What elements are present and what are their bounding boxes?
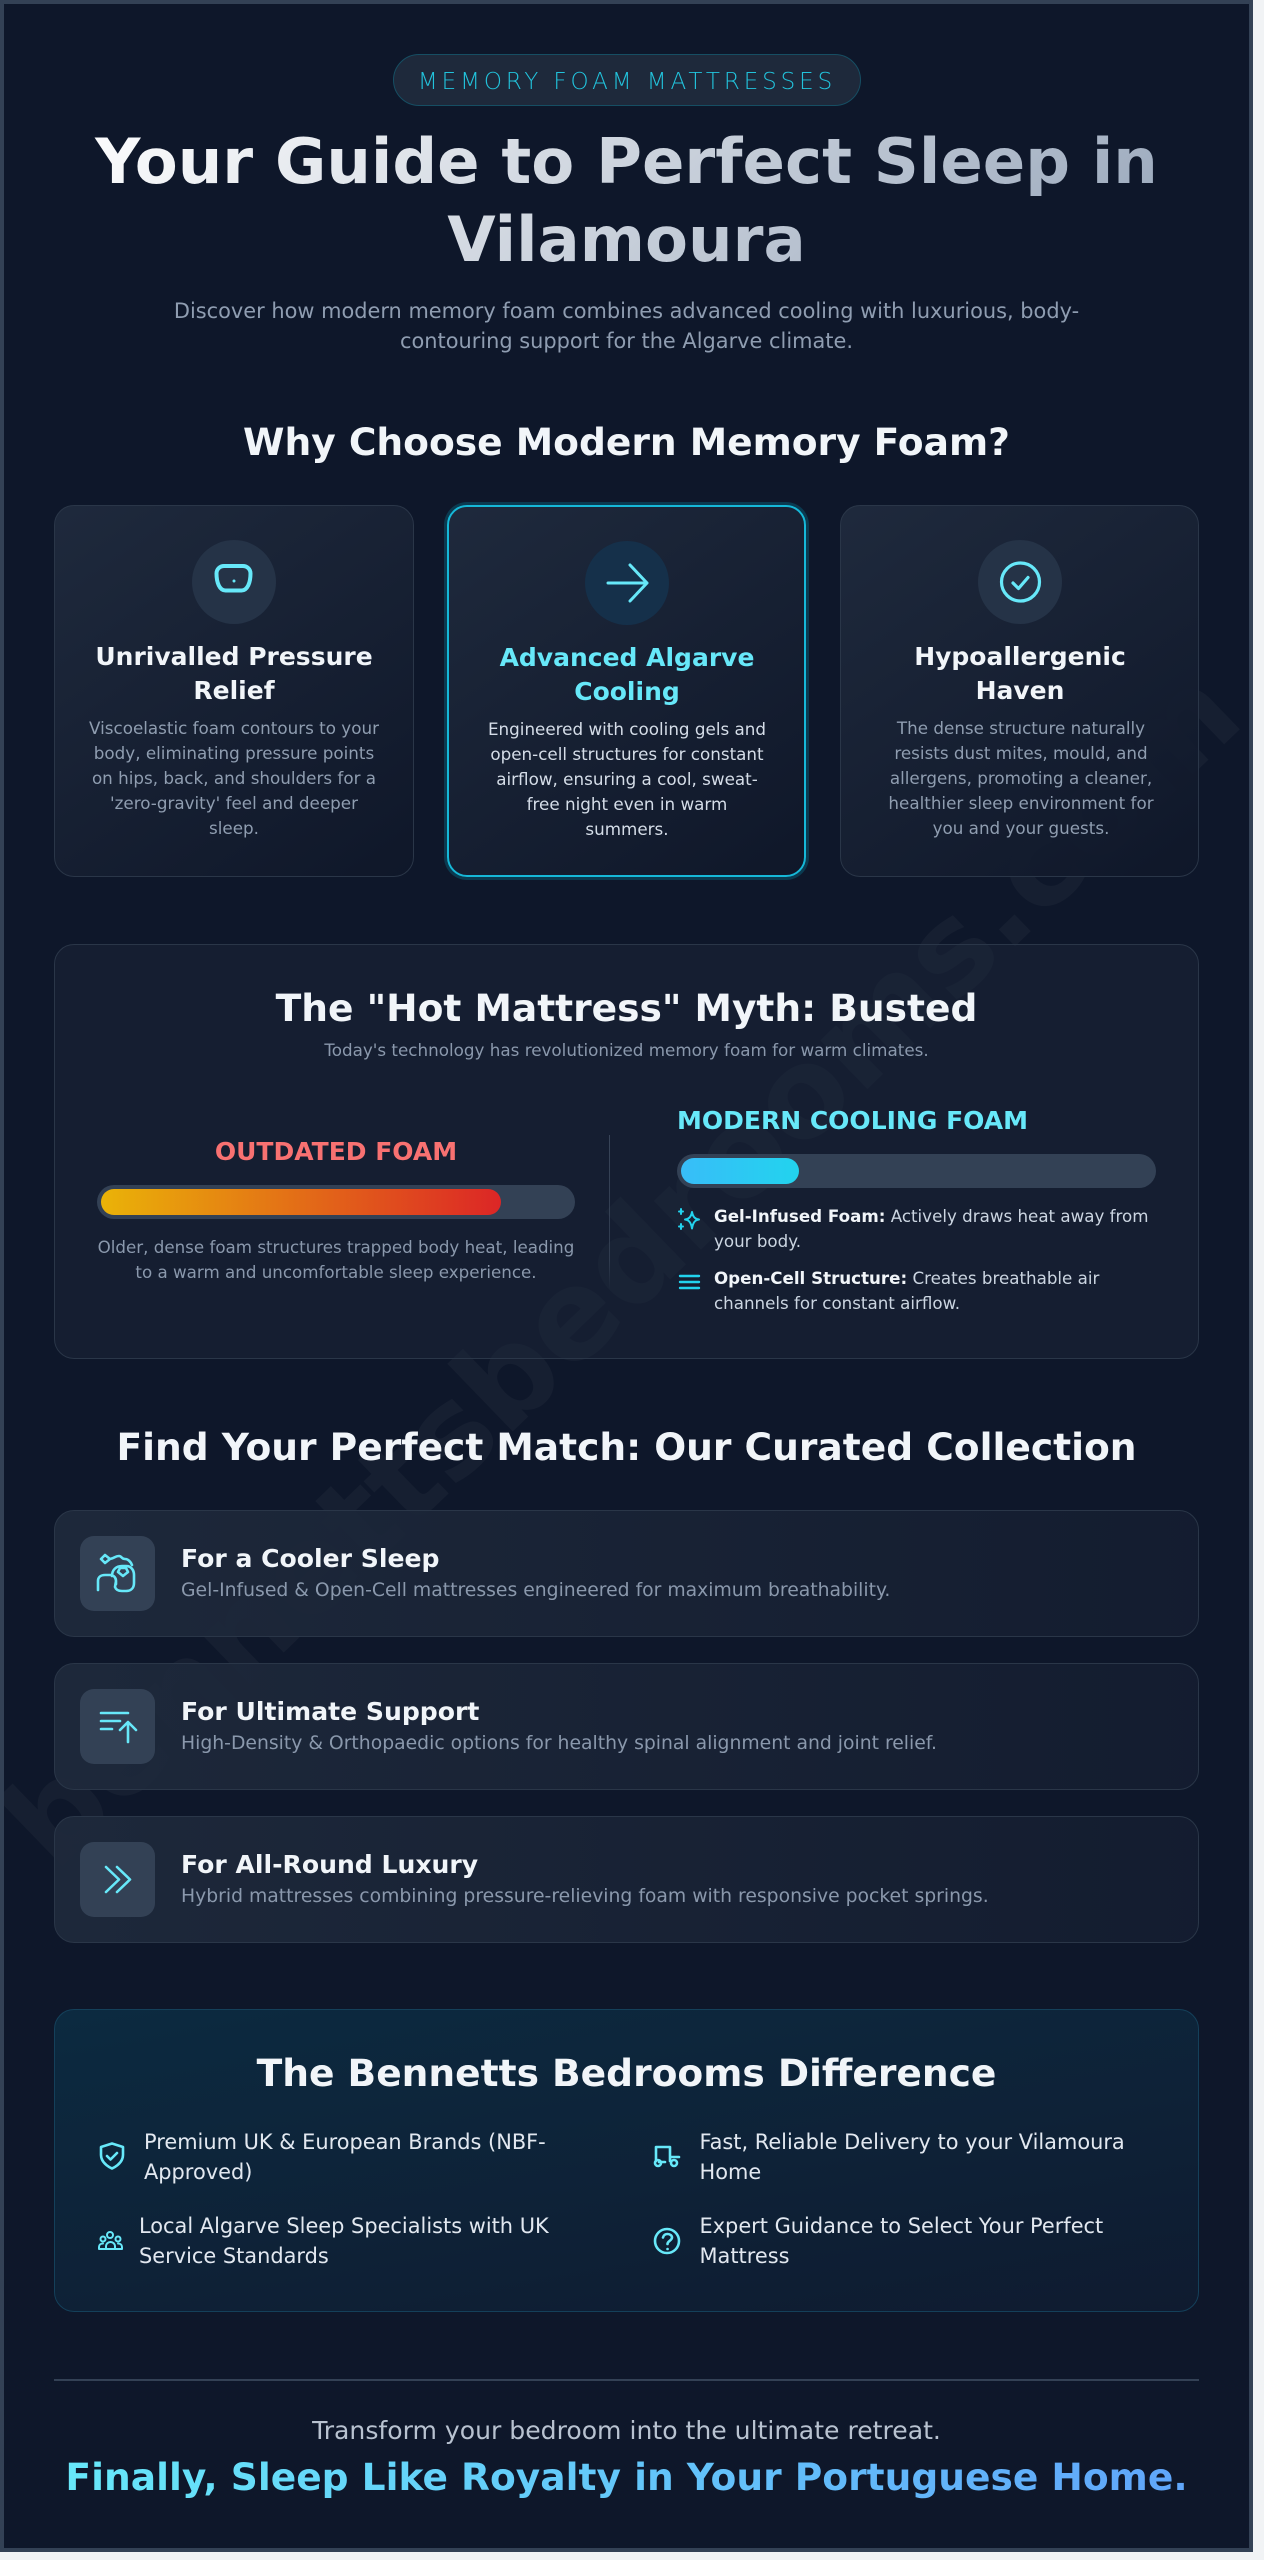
modern bar fill — [681, 1158, 799, 1184]
panel: hypoallergenic card — [840, 505, 1199, 877]
brands item: Approved) — [144, 2160, 252, 2184]
myth heading: The "Hot Mattress" Myth: Busted — [276, 986, 977, 1030]
subtitle: contouring support for the Algarve climate. — [400, 329, 853, 353]
gel-infused item: your body. — [714, 1231, 801, 1251]
footer line: Transform your bedroom into the ultimate retreat. — [312, 2416, 941, 2445]
icon: cooler sleep — [96, 1554, 136, 1592]
icon: arrow — [606, 563, 648, 603]
badge: memory foam mattresses: MEMORY FOAM MATTRESSES — [418, 69, 836, 95]
divider — [609, 1135, 610, 1290]
card 2 title: Advanced Algarve — [500, 643, 754, 672]
open-cell item: channels for constant airflow. — [714, 1293, 960, 1313]
outdated foam text — [98, 1237, 574, 1282]
panel: bennetts difference — [54, 2009, 1199, 2312]
badge: memory foam mattresses — [393, 54, 861, 106]
all-round luxury title: For All-Round Luxury — [181, 1850, 478, 1879]
icon box 2 — [80, 1689, 155, 1764]
title — [54, 122, 1199, 278]
card 3 text — [888, 718, 1154, 838]
icon circle 1 — [192, 540, 276, 624]
card 2 title — [500, 643, 754, 706]
guidance item — [700, 2214, 1103, 2268]
title: Your Guide to Perfect Sleep in — [95, 124, 1158, 198]
gel-infused item — [714, 1206, 1149, 1251]
card 1 text: 'zero-gravity' feel and deeper — [110, 793, 358, 813]
card 3 text: resists dust mites, mould, and — [894, 743, 1148, 763]
card 1 title — [95, 642, 373, 705]
icon: double chevron — [104, 1866, 132, 1894]
card 1 text — [89, 718, 379, 838]
card 3 title — [914, 642, 1126, 705]
outdated foam bar — [97, 1185, 575, 1219]
card 3 text: allergens, promoting a cleaner, — [890, 768, 1152, 788]
card 1 text: on hips, back, and shoulders for a — [92, 768, 376, 788]
footer rule — [54, 2379, 1199, 2381]
row: cooler sleep — [54, 1510, 1199, 1637]
brands item: Premium UK & European Brands (NBF- — [144, 2130, 546, 2154]
title: Vilamoura — [447, 202, 806, 276]
card 2 text — [488, 719, 766, 839]
icon: check circle — [1000, 561, 1042, 603]
card 1 title: Unrivalled Pressure — [95, 642, 373, 671]
card 2 text: summers. — [585, 819, 669, 839]
icon: help circle — [654, 2228, 680, 2254]
outdated foam text: Older, dense foam structures trapped body heat, leading — [98, 1237, 574, 1257]
icon: lines and up arrow — [100, 1712, 138, 1744]
brands item — [144, 2130, 546, 2184]
card 2 text: Engineered with cooling gels and — [488, 719, 766, 739]
icon circle 3 — [978, 540, 1062, 624]
icon: pressure relief — [214, 564, 252, 592]
footer tagline: Finally, Sleep Like Royalty in Your Portuguese Home. — [65, 2455, 1188, 2499]
panel: pressure relief card — [54, 505, 414, 877]
icon: truck — [654, 2146, 680, 2168]
card 1 text: body, eliminating pressure points — [94, 743, 374, 763]
guidance item: Mattress — [700, 2244, 789, 2268]
open-cell item — [714, 1268, 1100, 1313]
card 3 background — [840, 505, 1199, 877]
panel: advanced cooling card — [444, 502, 809, 880]
ultimate support title: For Ultimate Support — [181, 1697, 479, 1726]
cooler sleep text: Gel-Infused & Open-Cell mattresses engineered for maximum breathability. — [181, 1580, 890, 1600]
card 1 text: Viscoelastic foam contours to your — [89, 718, 379, 738]
outdated bar fill — [101, 1189, 501, 1215]
card 3 text: healthier sleep environment for — [888, 793, 1154, 813]
delivery item — [700, 2130, 1125, 2184]
icon circle 2 — [584, 541, 668, 625]
row: ultimate support — [54, 1663, 1199, 1790]
card 1 text: sleep. — [209, 818, 259, 838]
modern foam bar — [677, 1154, 1156, 1188]
icon box 3 — [80, 1842, 155, 1917]
specialists item — [139, 2214, 550, 2268]
card 3 title: Haven — [976, 676, 1064, 705]
icon: shield check — [100, 2142, 124, 2170]
card 2 title: Cooling — [574, 677, 680, 706]
card 2 text: airflow, ensuring a cool, sweat- — [496, 769, 758, 789]
card 3 text: The dense structure naturally — [897, 718, 1145, 738]
bennetts heading: The Bennetts Bedrooms Difference — [257, 2051, 996, 2095]
all-round luxury text: Hybrid mattresses combining pressure-relieving foam with responsive pocket springs. — [181, 1886, 989, 1906]
row: all-round luxury — [54, 1816, 1199, 1943]
card 3 title: Hypoallergenic — [914, 642, 1126, 671]
icon: users — [98, 2231, 123, 2250]
card 3 text: you and your guests. — [933, 818, 1109, 838]
modern cooling foam heading: MODERN COOLING FOAM — [677, 1106, 1028, 1135]
icon: lines — [678, 1274, 700, 1290]
icon: sparkle — [678, 1208, 700, 1230]
guidance item: Expert Guidance to Select Your Perfect — [700, 2214, 1103, 2238]
card 2 background — [447, 505, 806, 877]
open-cell item: Open-Cell Structure: Creates breathable air — [714, 1268, 1099, 1288]
heading: why choose: Why Choose Modern Memory Foam? — [243, 420, 1010, 464]
delivery item: Home — [700, 2160, 761, 2184]
specialists item: Service Standards — [139, 2244, 329, 2268]
delivery item: Fast, Reliable Delivery to your Vilamoura — [700, 2130, 1125, 2154]
card 1 title: Relief — [193, 676, 275, 705]
ultimate support text: High-Density & Orthopaedic options for healthy spinal alignment and joint relief. — [181, 1732, 937, 1754]
card 1 background — [54, 505, 414, 877]
specialists item: Local Algarve Sleep Specialists with UK — [139, 2214, 549, 2238]
outdated foam text: to a warm and uncomfortable sleep experience. — [135, 1262, 537, 1282]
outdated foam heading: OUTDATED FOAM — [215, 1137, 457, 1166]
myth subtitle: Today's technology has revolutionized memory foam for warm climates. — [324, 1040, 929, 1060]
card 2 text: open-cell structures for constant — [490, 744, 764, 764]
cooler sleep title: For a Cooler Sleep — [181, 1544, 439, 1573]
panel: hot mattress myth — [54, 944, 1199, 1359]
gel-infused item: Gel-Infused Foam: Actively draws heat away from — [714, 1206, 1149, 1226]
card 2 text: free night even in warm — [527, 794, 727, 814]
subtitle: Discover how modern memory foam combines advanced cooling with luxurious, body- — [174, 299, 1079, 323]
heading: collection: Find Your Perfect Match: Our Curated Collection — [116, 1425, 1137, 1469]
subtitle — [174, 299, 1079, 353]
icon box 1 — [80, 1536, 155, 1611]
